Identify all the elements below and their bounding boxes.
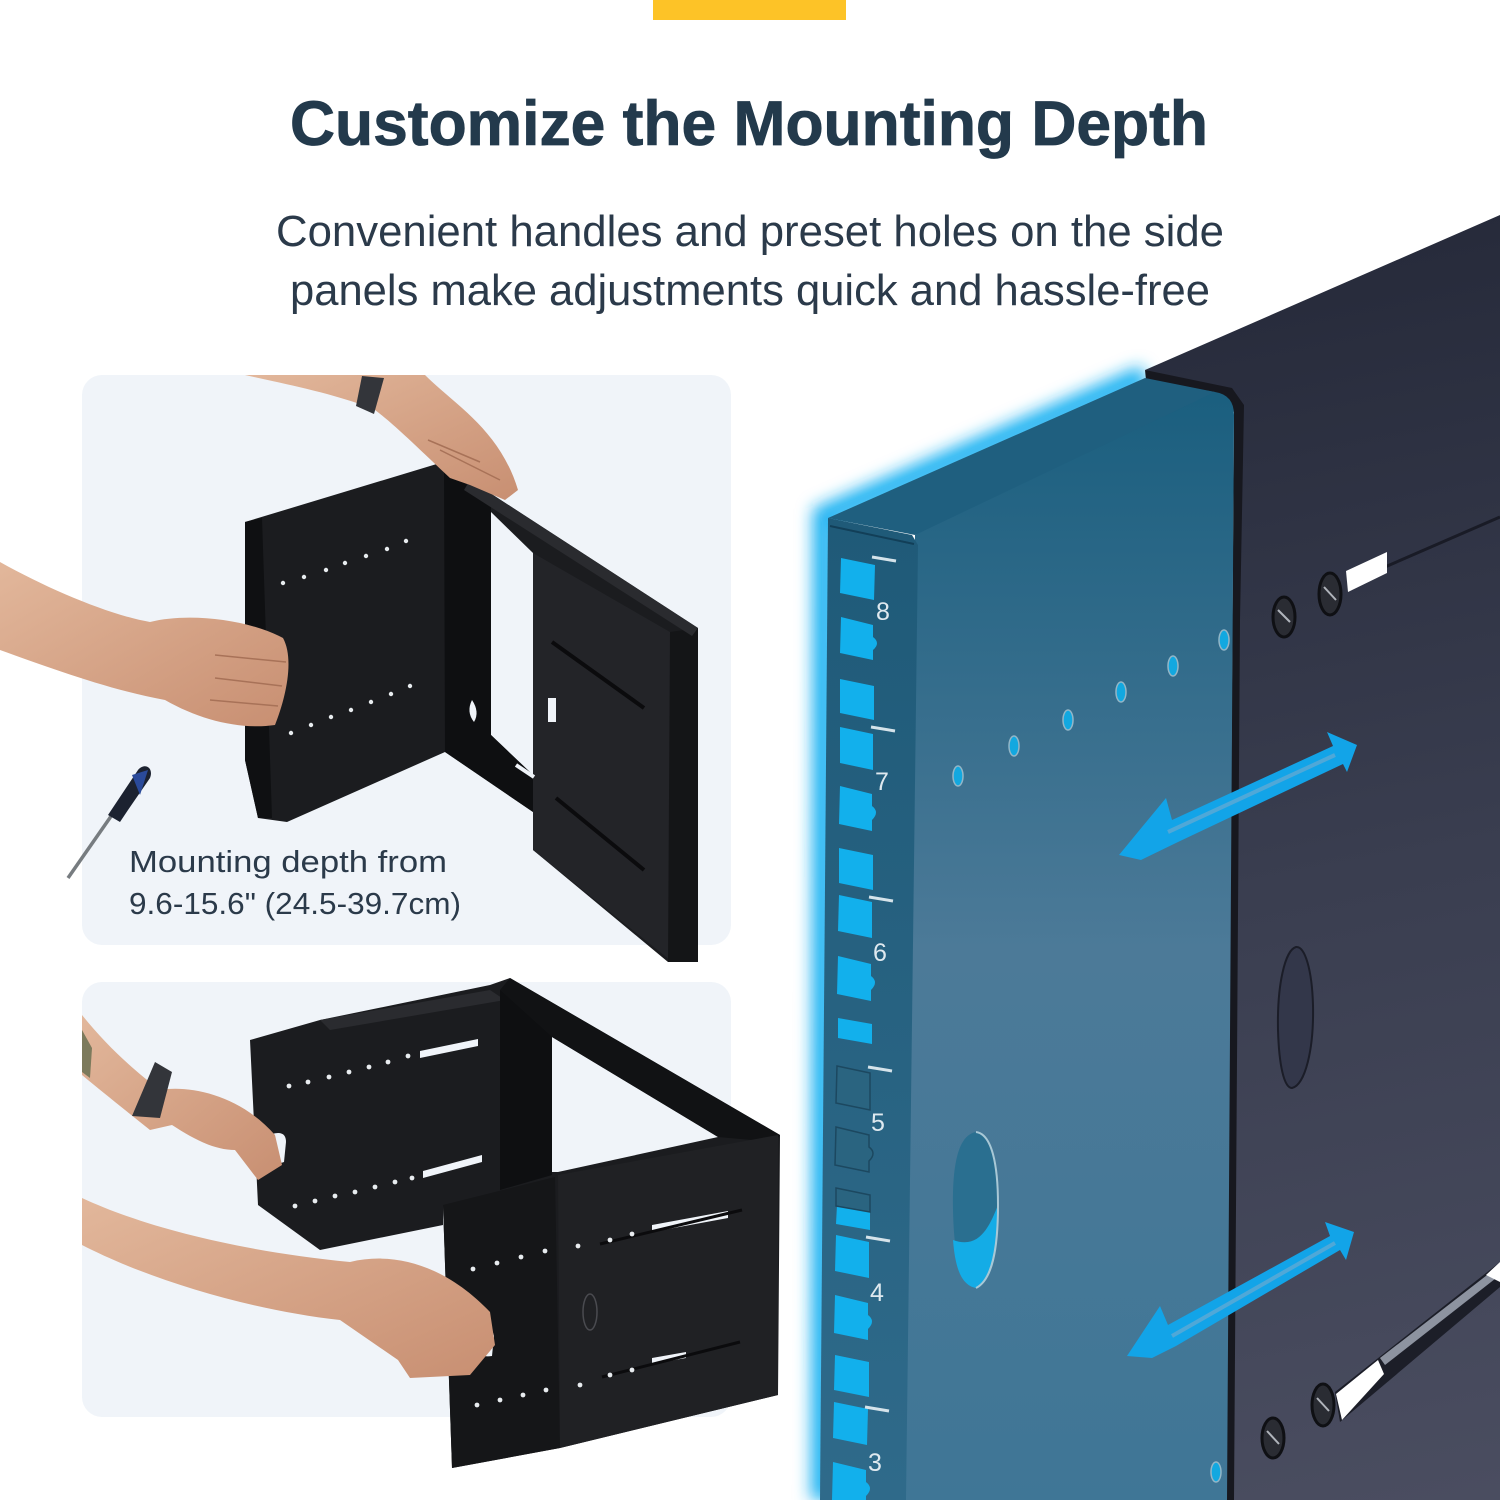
product close-up: rack depth adjustment <box>820 215 1500 1500</box>
unit numbers <box>868 598 890 1477</box>
blue panel handle cutout <box>953 1132 998 1288</box>
screws <box>1262 573 1341 1458</box>
unit numbers: 7 <box>875 768 889 796</box>
dark body handle cutout <box>1278 947 1313 1088</box>
dark openings <box>835 1066 873 1212</box>
subtitle: Convenient handles and preset holes on the side <box>276 207 1224 256</box>
caption: Mounting depth from <box>129 844 447 879</box>
caption <box>129 844 461 921</box>
unit numbers: 5 <box>871 1109 885 1137</box>
preset holes <box>287 1054 634 1407</box>
subtitle <box>276 207 1224 315</box>
screwdriver icon <box>68 766 151 878</box>
panel preset holes <box>953 630 1229 1482</box>
rack unit openings <box>832 558 877 1500</box>
dark outer rack body <box>1145 215 1500 1500</box>
rack frame collapsed <box>245 463 698 962</box>
upper arm and hand <box>82 1015 282 1180</box>
blue inner panel side <box>905 380 1234 1500</box>
slot lower <box>1335 1262 1500 1422</box>
hand and arm left <box>0 562 288 726</box>
yellow top accent bar <box>653 0 846 20</box>
lower arm and hand <box>82 1198 495 1378</box>
unit numbers: 4 <box>870 1279 884 1307</box>
unit numbers: 6 <box>873 939 887 967</box>
photo: hands adjusting rack, narrow depth <box>0 375 698 962</box>
preset holes <box>281 539 412 735</box>
title: Customize the Mounting Depth <box>290 89 1208 159</box>
blue panel front edge <box>820 518 918 1500</box>
glow behind blue panel <box>822 376 1145 1500</box>
unit tick marks <box>865 557 896 1411</box>
rack frame extended <box>250 978 780 1468</box>
caption: 9.6-15.6" (24.5-39.7cm) <box>129 886 461 921</box>
arrow: upper depth adjustment <box>1119 732 1357 860</box>
photo: hands adjusting rack, extended depth <box>82 978 780 1468</box>
panel: top photo background <box>82 375 731 945</box>
panel: bottom photo background <box>82 982 731 1417</box>
arrow: lower depth adjustment <box>1127 1222 1354 1358</box>
hand and watch top <box>245 375 518 500</box>
unit numbers: 8 <box>876 598 890 626</box>
white slots <box>272 1039 728 1364</box>
subtitle: panels make adjustments quick and hassle-free <box>290 266 1210 315</box>
slot upper <box>1346 517 1500 592</box>
unit numbers: 3 <box>868 1449 882 1477</box>
